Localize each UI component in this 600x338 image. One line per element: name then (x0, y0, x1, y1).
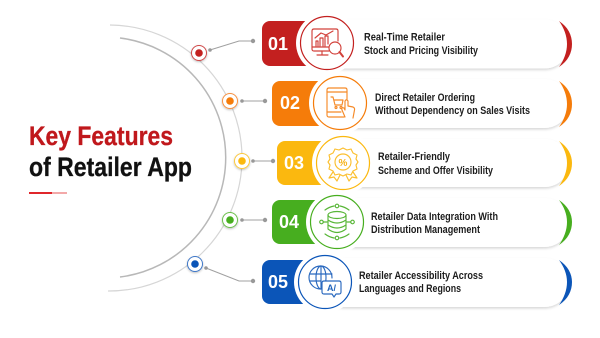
connector 5 (204, 266, 255, 283)
title (29, 121, 192, 182)
title: of Retailer App (29, 152, 192, 182)
icon: percent badge: % (339, 158, 348, 169)
icon: globe with translation bubble: A/ (327, 283, 336, 293)
icon: percent badge (328, 148, 358, 181)
text: feature 01: Real-Time Retailer (364, 32, 445, 44)
text: feature 02 (375, 92, 530, 117)
icon: globe with translation bubble (309, 266, 341, 297)
panel: feature 01: 01 (268, 33, 288, 54)
title underline (29, 192, 67, 194)
node 2 (222, 94, 238, 108)
node 3 (234, 154, 250, 168)
text: feature 05: Retailer Accessibility Across (359, 270, 483, 282)
title: Key Features (29, 121, 173, 151)
icon: monitor with magnifier (312, 29, 343, 56)
panel: feature 03 (277, 132, 572, 194)
connector 4 (240, 218, 267, 222)
text: feature 04: Retailer Data Integration With (371, 211, 498, 223)
panel: feature 05 (262, 251, 572, 313)
panel: feature 04: 04 (279, 211, 300, 232)
text: feature 01 (364, 32, 478, 57)
text: feature 04 (371, 211, 498, 236)
text: feature 03: Retailer-Friendly (378, 151, 450, 163)
connector 3 (251, 159, 275, 163)
node 5 (188, 256, 202, 272)
text: feature 05: Languages and Regions (359, 283, 461, 295)
connector 1 (208, 39, 255, 52)
text: feature 03 (378, 151, 493, 177)
text: feature 04: Distribution Management (371, 224, 480, 236)
text: feature 02: Direct Retailer Ordering (375, 92, 475, 104)
text: feature 01: Stock and Pricing Visibility (364, 45, 478, 57)
outer arc (108, 25, 242, 291)
text: feature 03: Scheme and Offer Visibility (378, 165, 493, 177)
panel: feature 01 (262, 12, 572, 74)
node 1 (192, 46, 206, 60)
text: feature 02: Without Dependency on Sales Visits (375, 105, 530, 117)
panel: feature 04 (272, 191, 572, 253)
node 4 (222, 212, 238, 228)
connector 2 (240, 99, 267, 103)
icon: phone with cart and hand (327, 88, 355, 118)
panel: feature 02 (272, 72, 572, 134)
icon: database network (320, 204, 354, 240)
panel: feature 05: 05 (268, 271, 288, 292)
inner arc (120, 38, 226, 277)
panel: feature 02: 02 (280, 92, 300, 113)
panel: feature 03: 03 (284, 152, 304, 173)
text: feature 05 (359, 270, 483, 295)
